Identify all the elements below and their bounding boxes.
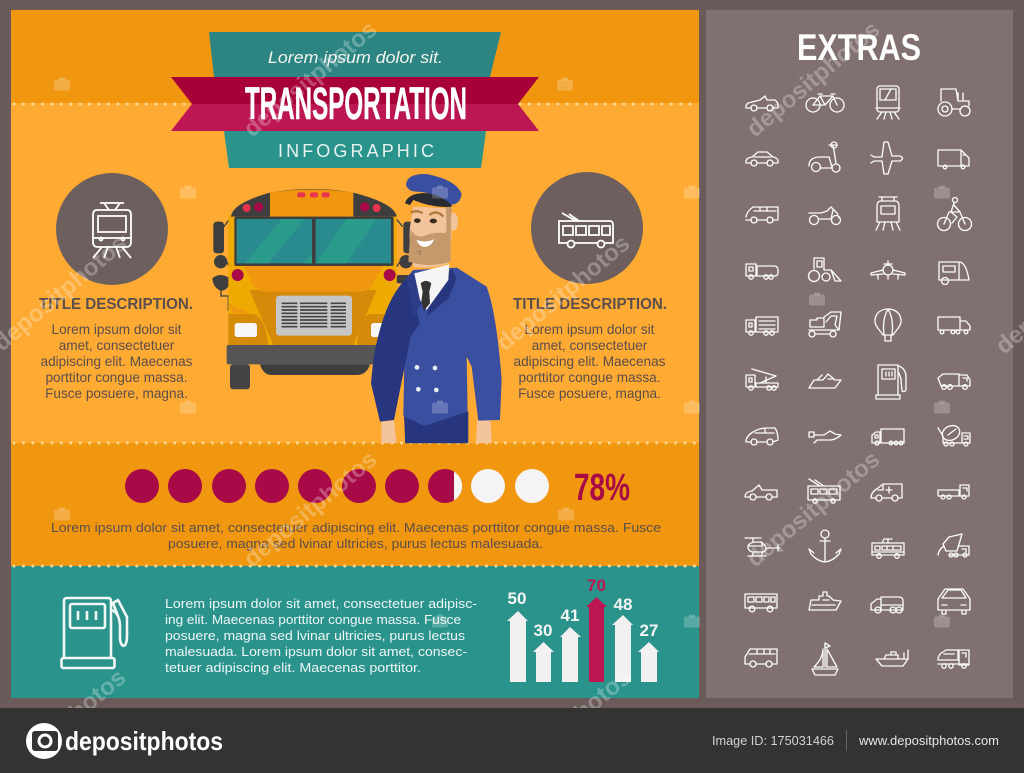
icon: bicycle: [806, 94, 844, 112]
icon: pickup: [745, 485, 777, 500]
chart: arrow bars: [507, 576, 659, 682]
icon: delivery van: [938, 150, 969, 169]
icon: sedan: [746, 152, 778, 166]
watermark: depositphotos overlays: depositphotos: [742, 16, 885, 143]
chart: arrow bars: 27: [640, 621, 658, 640]
watermark: depositphotos overlays: depositphotos: [492, 230, 635, 357]
icon: sailboat: [812, 643, 838, 675]
icon: fuel pump small: [876, 365, 906, 399]
heading: extras: EXTRAS: [797, 27, 921, 68]
icon: helicopter: [745, 538, 779, 556]
text block: left description: [39, 296, 193, 401]
text block: right description: porttitor congue massa.: [518, 370, 661, 385]
icon: yacht: [809, 374, 841, 388]
watermark: camera marks: [54, 78, 950, 628]
icon: fuel pump: [62, 598, 127, 668]
icon: airplane: [871, 142, 902, 174]
text block: right description: adipiscing elit. Maecenas: [514, 354, 666, 369]
text block: teal panel: [165, 596, 477, 675]
icon: convertible: [746, 96, 778, 111]
text block: left description: porttitor congue massa.: [45, 370, 188, 385]
text block: teal panel: posuere, magna sed lvinar ultricies, purus lectus: [165, 628, 465, 643]
icon: box truck: [746, 317, 778, 335]
icon: motorcycle: [809, 207, 840, 224]
icon: city bus: [745, 594, 777, 612]
icon: train badge: [56, 173, 168, 285]
text block: right description: [513, 296, 667, 401]
icon: bulldozer: [808, 258, 841, 282]
icon: semi truck: [938, 317, 970, 334]
icon: speedboat: [809, 431, 841, 443]
icon: trolleybus badge: [531, 172, 643, 284]
icon: cruise ship: [809, 592, 841, 610]
icon: cement mixer: [938, 423, 970, 446]
title: TRANSPORTATION: [245, 78, 467, 129]
icon: hot air balloon: [875, 309, 901, 341]
icon: tractor: [938, 89, 970, 116]
text block: left description: adipiscing elit. Maecenas: [41, 354, 193, 369]
icon: minibus: [745, 649, 777, 667]
progress dots: [125, 469, 549, 503]
icon: tanker truck: [746, 264, 778, 279]
chart: arrow bars: 50: [508, 589, 526, 608]
icon: ambulance: [871, 484, 902, 501]
illustration: school bus: [212, 189, 413, 389]
heading: right: TITLE DESCRIPTION.: [513, 296, 667, 313]
icon: cargo boat: [876, 650, 908, 666]
icon: airliner front: [871, 261, 905, 279]
icon: bus rear: [872, 539, 904, 558]
icon: scooter: [809, 142, 840, 172]
icon: crane truck: [746, 369, 778, 390]
title banner: [171, 32, 539, 168]
icon: trolleybus: [808, 479, 840, 503]
icon: anchor: [809, 530, 841, 562]
text block: progress caption: posuere, magna sed lvinar ultricies, purus lectus malesuada.: [168, 536, 543, 551]
watermark: depositphotos overlays: depositphotos: [742, 446, 885, 573]
chart: arrow bars: 48: [614, 595, 632, 614]
icon: minivan 2: [746, 428, 778, 445]
icon grid: extras: [745, 86, 972, 675]
panel: main infographic: [11, 10, 699, 698]
text block: teal panel: Lorem ipsum dolor sit amet, consectetuer adipisc-: [165, 596, 477, 611]
chart: arrow bars: 70: [587, 576, 606, 595]
text block: right description: amet, consectetuer: [532, 338, 648, 353]
logo: wordmark: depositphotos: [65, 726, 223, 756]
panel: extras: [706, 10, 1013, 698]
icon: minivan: [746, 207, 778, 223]
icon: metro train: [876, 86, 900, 119]
watermark: depositphotos overlays: depositphotos: [239, 16, 382, 143]
text block: left description: Fusce posuere, magna.: [45, 386, 188, 401]
text block: teal panel: malesuada. Lorem ipsum dolor sit amet, consec-: [165, 644, 467, 659]
subtitle: Lorem ipsum dolor sit.: [268, 48, 443, 67]
chart: arrow bars: 30: [534, 621, 552, 640]
text block: right description: Lorem ipsum dolor sit: [525, 322, 655, 337]
icon: car carrier: [938, 650, 969, 668]
icon: box lorry: [872, 429, 904, 445]
text block: progress caption: Lorem ipsum dolor sit amet, consectetuer adipiscing elit. Maecenas porttitor congue massa. Fusce: [51, 520, 661, 535]
icon: tipper truck: [938, 534, 969, 557]
chart: arrow bars: 41: [561, 606, 579, 625]
text block: left description: amet, consectetuer: [59, 338, 175, 353]
icon: excavator: [809, 312, 841, 337]
image id: Image ID: 175031466: [712, 733, 834, 748]
subheading: INFOGRAPHIC: [278, 141, 434, 161]
icon: flatbed truck: [938, 485, 969, 499]
icon: dump truck: [938, 374, 970, 389]
text block: right description: Fusce posuere, magna.: [518, 386, 661, 401]
icon: caravan: [939, 262, 969, 284]
text block: teal panel: tetuer adipiscing elit. Maecenas porttitor.: [165, 660, 421, 675]
illustration: bus driver: [371, 174, 502, 443]
text block: left description: Lorem ipsum dolor sit: [52, 322, 182, 337]
watermark: depositphotos overlays: depositphotos: [239, 446, 382, 573]
logo: camera mark: [26, 723, 62, 759]
progress value: 78%: [574, 467, 630, 509]
icon: car front: [938, 589, 970, 614]
text block: progress caption: [51, 520, 661, 551]
website: www.depositphotos.com: [858, 733, 999, 748]
text block: teal panel: ing elit. Maecenas porttitor congue massa. Fusce: [165, 612, 461, 627]
footer bar: [0, 708, 1024, 773]
icon: tram: [876, 197, 900, 230]
icon: tanker van: [871, 597, 903, 613]
heading: left: TITLE DESCRIPTION.: [39, 296, 193, 313]
icon: cyclist: [938, 198, 972, 230]
